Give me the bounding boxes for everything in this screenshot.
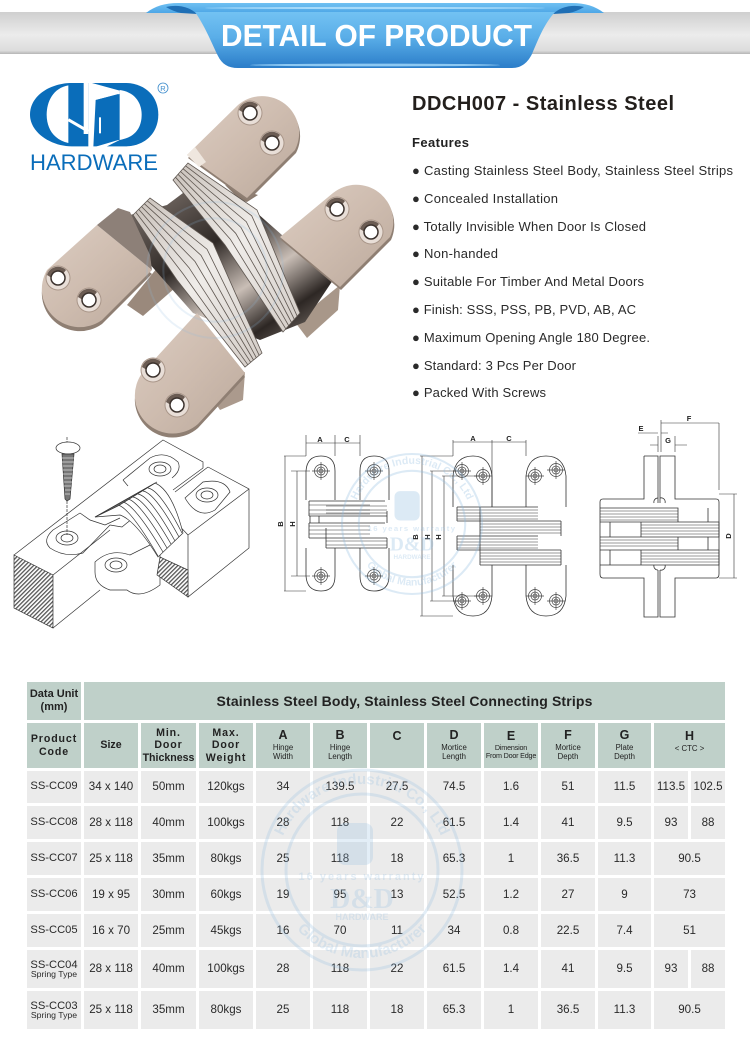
specification table: Min. — [156, 727, 181, 739]
logo: HARDWARE — [30, 150, 158, 175]
specification table: 18 — [391, 852, 403, 865]
specification table: 113.5 — [657, 780, 685, 793]
features heading: Features — [412, 135, 469, 150]
specification table: 41 — [562, 816, 574, 829]
specification table: 25 x 118 — [89, 1003, 133, 1016]
bottom leaf — [135, 313, 245, 438]
specification table: 80kgs — [211, 1003, 241, 1016]
specification table: F — [564, 728, 572, 742]
dimension labels: dimensioned view — [411, 434, 512, 540]
specification table: Hinge — [330, 743, 350, 752]
specification table: 90.5 — [678, 1003, 701, 1016]
wrapped hinge strips — [95, 482, 183, 557]
specification table: 30mm — [152, 888, 185, 901]
specification table: Mortice — [555, 743, 581, 752]
specification table: SS-CC03 — [30, 1000, 78, 1012]
specification table: Thickness — [143, 752, 194, 764]
specification table: H — [685, 729, 694, 743]
features list — [412, 163, 734, 400]
specification table: 1.4 — [503, 816, 519, 829]
specification table: 51 — [683, 924, 696, 937]
dimension labels: side view — [638, 414, 733, 539]
watermark: table area: Global Manufacturer — [299, 924, 425, 958]
specification table: 28 — [277, 962, 289, 975]
banner title: DETAIL OF PRODUCT — [221, 18, 532, 53]
dimension labels: dimensioned view: H — [423, 534, 432, 540]
slot outlines — [47, 455, 230, 555]
specification table: 61.5 — [443, 962, 465, 975]
specification table: Door — [212, 739, 240, 751]
specification table: Length — [328, 752, 352, 761]
features list: ● Totally Invisible When Door Is Closed — [412, 219, 646, 234]
specification table: 70 — [334, 924, 346, 937]
specification table: B — [335, 728, 345, 742]
specification table: 93 — [665, 962, 677, 975]
watermark: table area: D&D — [330, 884, 394, 915]
watermark: table area: HARDWARE — [336, 912, 388, 922]
specification table: Depth — [558, 752, 578, 761]
dimension labels: side view: F — [687, 414, 692, 423]
specification table: Spring Type — [31, 968, 77, 978]
specification table: 65.3 — [443, 852, 465, 865]
specification table: Stainless Steel Body, Stainless Steel Connecting Strips — [217, 693, 593, 709]
watermark: drawing area: Hardware Industrial Co., Ltd — [350, 456, 474, 500]
screw — [56, 437, 80, 535]
specification table: Width — [273, 752, 293, 761]
specification table: Mortice — [441, 743, 467, 752]
logo — [30, 82, 168, 175]
features list: ● Concealed Installation — [412, 191, 558, 206]
dimension labels: dimensioned view: A — [470, 434, 476, 443]
specification table: Length — [442, 752, 466, 761]
specification table: 7.4 — [616, 924, 633, 937]
dimension labels: dimensioned view: B — [411, 534, 420, 540]
specification table: Dimension — [495, 743, 527, 752]
specification table: 0.8 — [503, 924, 519, 937]
specification table: SS-CC08 — [30, 816, 78, 828]
specification table: 61.5 — [443, 816, 465, 829]
specification table: Code — [39, 746, 69, 758]
specification table: 35mm — [152, 1003, 185, 1016]
specification table: 73 — [683, 888, 696, 901]
watermark: drawing area: 16 years warranty — [368, 524, 456, 533]
dimension labels: front view: C — [344, 435, 350, 444]
hinge photograph — [42, 96, 394, 438]
specification table: From Door Edge — [486, 751, 536, 760]
specification table: D — [449, 728, 459, 742]
specification table: 36.5 — [557, 852, 579, 865]
connecting strips — [133, 163, 300, 367]
header banner — [0, 3, 750, 68]
specification table: 34 x 140 — [89, 780, 133, 793]
specification table: 80kgs — [211, 852, 241, 865]
features list: ● Standard: 3 Pcs Per Door — [412, 358, 577, 373]
specification table: 22 — [391, 816, 403, 829]
watermark: table area: Hardware Industrial Co., Ltd — [274, 773, 450, 835]
specification table: 9.5 — [616, 816, 633, 829]
specification table: 22.5 — [557, 924, 579, 937]
features list: ● Casting Stainless Steel Body, Stainless Steel Strips — [412, 163, 734, 178]
specification table: Size — [100, 739, 122, 751]
specification table: 90.5 — [678, 852, 701, 865]
technical drawing: front view — [284, 435, 389, 591]
specification table: 25mm — [152, 924, 185, 937]
specification table — [27, 682, 725, 1029]
specification table: 60kgs — [211, 888, 241, 901]
features list: ● Suitable For Timber And Metal Doors — [412, 274, 644, 289]
specification table: 1.2 — [503, 888, 519, 901]
watermark: drawing area: HARDWARE — [393, 554, 431, 561]
dimension labels: side view: G — [665, 436, 671, 445]
specification table: 18 — [391, 1003, 403, 1016]
watermark: drawing area: Global Manufacturer — [368, 562, 456, 586]
specification table: 118 — [331, 962, 349, 975]
specification table: 50mm — [152, 780, 185, 793]
specification table: < CTC > — [675, 744, 704, 753]
dimension labels: front view: A — [317, 435, 323, 444]
specification table: 40mm — [152, 816, 185, 829]
specification table: 93 — [665, 816, 677, 829]
specification table: 25 x 118 — [89, 852, 133, 865]
specification table: 139.5 — [325, 780, 354, 793]
specification table: 27.5 — [386, 780, 408, 793]
specification table: 120kgs — [207, 780, 245, 793]
specification table: 40mm — [152, 962, 185, 975]
specification table: 11.5 — [614, 780, 635, 793]
features list: ● Finish: SSS, PSS, PB, PVD, AB, AC — [412, 302, 636, 317]
specification table: Hinge — [273, 743, 293, 752]
watermark: drawing area — [341, 453, 483, 595]
specification table: C — [392, 729, 402, 743]
dimension labels: side view: D — [724, 533, 733, 539]
features list: ● Packed With Screws — [412, 385, 546, 400]
specification table: 36.5 — [557, 1003, 579, 1016]
specification table: SS-CC05 — [30, 924, 78, 936]
specification table: 102.5 — [694, 780, 723, 793]
specification table: 118 — [331, 1003, 349, 1016]
specification table: Plate — [616, 743, 633, 752]
features list: ● Non-handed — [412, 246, 498, 261]
specification table: (mm) — [41, 701, 67, 713]
specification table: 100kgs — [207, 962, 245, 975]
specification table: SS-CC06 — [30, 888, 78, 900]
dimension labels: dimensioned view: H — [434, 534, 443, 540]
specification table: 19 x 95 — [92, 888, 130, 901]
specification table: 118 — [331, 852, 349, 865]
specification table: SS-CC04 — [30, 958, 78, 970]
logo: R — [160, 84, 166, 93]
specification table: 16 — [277, 924, 289, 937]
specification table: 45kgs — [211, 924, 241, 937]
specification table: 9 — [621, 888, 628, 901]
specification table: 95 — [334, 888, 346, 901]
watermark: table area — [260, 768, 464, 972]
specification table: 74.5 — [443, 780, 465, 793]
technical drawing: side view — [600, 420, 737, 617]
specification table: 88 — [702, 816, 714, 829]
specification table: E — [507, 729, 515, 743]
specification table: 34 — [448, 924, 460, 937]
specification table: Product — [31, 733, 77, 745]
specification table: 22 — [391, 962, 403, 975]
specification table: 118 — [331, 816, 349, 829]
specification table: 28 — [277, 816, 289, 829]
specification table: Door — [154, 739, 183, 751]
dimension labels: side view: E — [638, 424, 644, 433]
specification table: A — [278, 728, 288, 742]
specification table: SS-CC07 — [30, 852, 78, 864]
specification table: Data Unit — [30, 688, 78, 700]
specification table: 25 — [277, 852, 289, 865]
specification table: 1.4 — [503, 962, 519, 975]
technical drawing: dimensioned view — [420, 440, 566, 616]
specification table: Max. — [212, 727, 240, 739]
specification table: 11.3 — [614, 852, 635, 865]
installation drawing — [14, 437, 249, 628]
dimension labels: front view — [276, 435, 350, 527]
specification table: 1 — [508, 1003, 514, 1016]
right leaf — [280, 185, 394, 290]
left leaf — [42, 208, 152, 331]
specification table: 52.5 — [443, 888, 465, 901]
specification table: 28 x 118 — [89, 962, 133, 975]
watermark: drawing area: D&D — [390, 535, 434, 556]
bottom leaf of installed hinge — [95, 540, 160, 594]
dimension labels: front view: B — [276, 521, 285, 527]
top-right leaf — [187, 96, 300, 201]
features list: ● Maximum Opening Angle 180 Degree. — [412, 330, 650, 345]
specification table: 88 — [702, 962, 714, 975]
specification table: 11 — [391, 924, 403, 937]
specification table: 35mm — [152, 852, 185, 865]
dimension labels: dimensioned view: C — [506, 434, 512, 443]
watermark: hinge photo — [147, 202, 283, 338]
specification table: 19 — [277, 888, 289, 901]
specification table: 34 — [277, 780, 289, 793]
specification table: 51 — [562, 780, 574, 793]
specification table: 28 x 118 — [89, 816, 133, 829]
watermark: table area: 16 years warranty — [299, 871, 425, 883]
specification table: 27 — [562, 888, 574, 901]
dimension labels: front view: H — [288, 521, 297, 527]
specification table: 65.3 — [443, 1003, 465, 1016]
specification table: 100kgs — [207, 816, 245, 829]
product name heading: DDCH007 - Stainless Steel — [412, 93, 674, 115]
specification table: 16 x 70 — [92, 924, 130, 937]
specification table: 1.6 — [503, 780, 519, 793]
specification table: 13 — [391, 888, 403, 901]
specification table: SS-CC09 — [30, 780, 78, 792]
specification table: 25 — [277, 1003, 289, 1016]
specification table: Spring Type — [31, 1010, 77, 1020]
specification table: Weight — [206, 752, 246, 764]
specification table: G — [620, 728, 629, 742]
specification table: 9.5 — [616, 962, 633, 975]
specification table: 1 — [508, 852, 514, 865]
specification table: 41 — [562, 962, 574, 975]
specification table: 11.3 — [614, 1003, 635, 1016]
specification table: Depth — [614, 752, 635, 761]
